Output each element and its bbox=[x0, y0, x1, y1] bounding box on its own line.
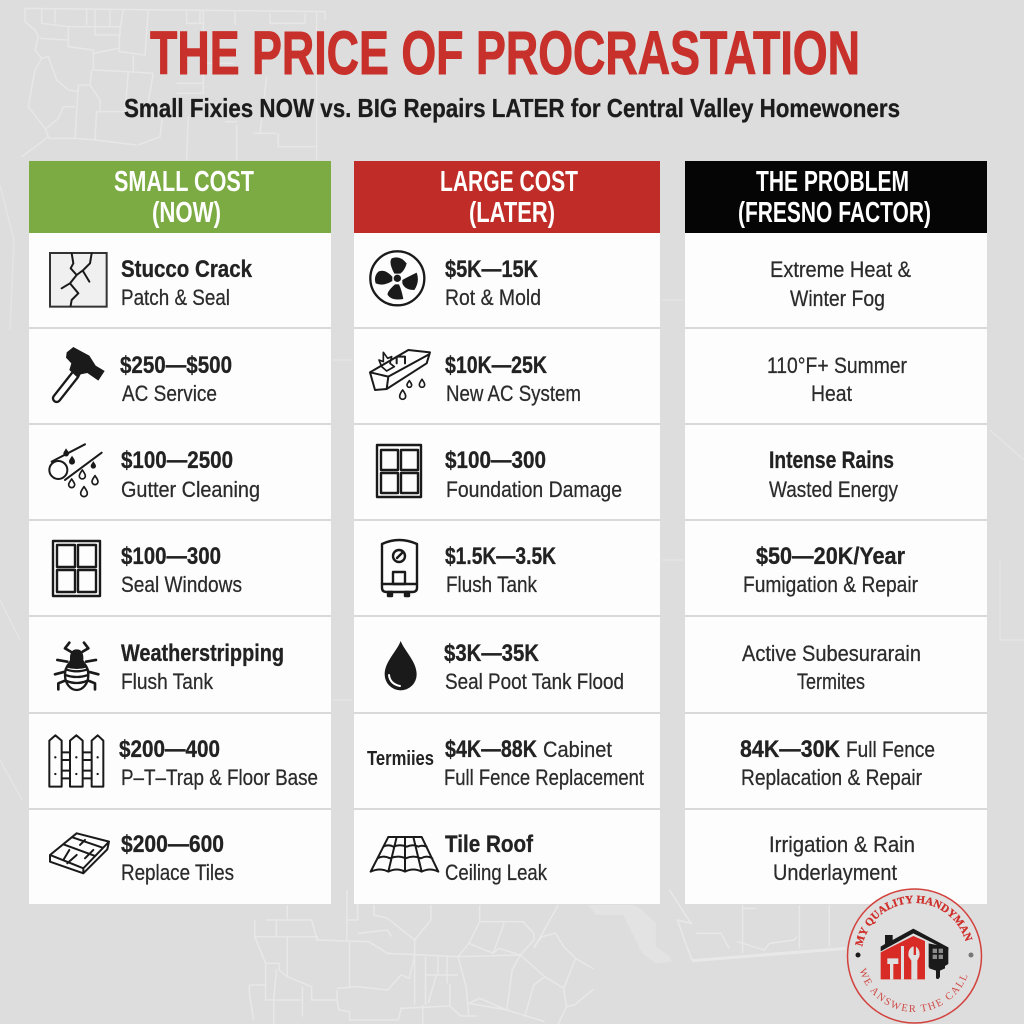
row 4 text: Seal Windows bbox=[121, 572, 242, 597]
icon: stucco crack bbox=[50, 253, 107, 307]
row 3 text: Gutter Cleaning bbox=[121, 477, 260, 502]
row 7 text: Ceiling Leak bbox=[445, 860, 548, 885]
logo house icon bbox=[881, 929, 948, 979]
row 3 text: Foundation Damage bbox=[446, 477, 622, 502]
row 5 text bbox=[121, 640, 284, 694]
row 5 text: Active Subesurarain bbox=[742, 641, 921, 666]
row 6 text bbox=[444, 736, 644, 790]
row 6 text bbox=[119, 736, 318, 790]
row 6 text: Cabinet bbox=[543, 737, 612, 762]
row 4 text: Flush Tank bbox=[446, 572, 538, 597]
icon: gutter bbox=[49, 444, 102, 497]
row 1 text bbox=[770, 257, 911, 311]
label: termites: Termiies bbox=[367, 748, 434, 770]
row 4 text bbox=[121, 543, 242, 597]
row 4 text bbox=[445, 543, 557, 597]
icon: fan bbox=[370, 251, 424, 305]
row 6 text: $200—400 bbox=[119, 736, 220, 763]
row 4 text: $100—300 bbox=[121, 543, 221, 570]
row 7 text: Underlayment bbox=[773, 860, 897, 885]
row 4 text bbox=[743, 543, 918, 597]
row 7 text bbox=[769, 832, 915, 885]
header: the problem: THE PROBLEM bbox=[756, 166, 909, 198]
row 1 text: Patch & Seal bbox=[121, 285, 230, 310]
row 2 text bbox=[445, 352, 581, 406]
row 7 text: Replace Tiles bbox=[121, 860, 234, 885]
header: small cost: SMALL COST bbox=[114, 166, 254, 198]
logo name: MY QUALITY HANDYMAN bbox=[854, 896, 973, 947]
row 1 text: $5K—15K bbox=[445, 256, 539, 283]
row 3 text bbox=[121, 447, 260, 502]
row 2 text bbox=[120, 352, 232, 406]
icon: clogged gutter bbox=[370, 350, 430, 399]
logo tagline: WE ANSWER THE CALL bbox=[860, 968, 968, 1012]
row 7 text: Tile Roof bbox=[445, 831, 534, 858]
row 3 text: $100—2500 bbox=[121, 447, 233, 474]
row 6 text: Full Fence Replacement bbox=[444, 765, 644, 790]
subtitle: Small Fixies NOW vs. BIG Repairs LATER for Central Valley Homewoners bbox=[124, 93, 900, 123]
header: large cost: (LATER) bbox=[469, 197, 555, 229]
row 5 text: Termites bbox=[797, 669, 865, 694]
row 4 text: $1.5K—3.5K bbox=[445, 543, 557, 570]
row 5 text bbox=[444, 640, 624, 694]
icon: termite bug bbox=[55, 643, 98, 690]
row 6 text: 84K—30K bbox=[740, 736, 841, 763]
icon: floor tiles bbox=[50, 833, 109, 873]
row 6 text: $4K—88K bbox=[445, 736, 538, 763]
row 2 text: $10K—25K bbox=[445, 352, 548, 379]
row 3 text bbox=[445, 447, 622, 502]
row 1 text bbox=[121, 256, 253, 310]
row 4 text: $50—20K/Year bbox=[756, 543, 905, 570]
logo badge bbox=[846, 888, 982, 1024]
icon: window bbox=[53, 541, 100, 596]
row 2 text bbox=[767, 353, 907, 406]
row 2 text: Heat bbox=[811, 381, 852, 406]
row 1 text: Extreme Heat & bbox=[770, 257, 911, 282]
row 5 text: Seal Poot Tank Flood bbox=[445, 669, 624, 694]
row 1 text bbox=[445, 256, 541, 310]
row 2 text: 110°F+ Summer bbox=[767, 353, 907, 378]
row 3 text: $100—300 bbox=[445, 447, 546, 474]
header: the problem bbox=[685, 161, 987, 233]
row 2 text: $250—$500 bbox=[120, 352, 232, 379]
header: small cost bbox=[29, 161, 331, 233]
row 6 text: Replacation & Repair bbox=[741, 765, 922, 790]
row 6 text bbox=[740, 736, 935, 790]
row 6 text: Full Fence bbox=[846, 737, 935, 762]
row 6 text: P–T–Trap & Floor Base bbox=[121, 765, 318, 790]
icon: window bbox=[377, 445, 421, 497]
row 5 text bbox=[742, 641, 921, 694]
row 3 text bbox=[769, 447, 898, 502]
icon: water heater bbox=[382, 540, 417, 596]
row 1 text: Rot & Mold bbox=[445, 285, 541, 310]
icon: tile roof bbox=[371, 837, 438, 872]
row 1 text: Winter Fog bbox=[790, 286, 885, 311]
row 2 text: New AC System bbox=[446, 381, 581, 406]
row 4 text: Fumigation & Repair bbox=[743, 572, 918, 597]
row 7 text bbox=[121, 831, 234, 885]
panel: the problem (fresno factor) bbox=[685, 161, 987, 904]
row 5 text: Weatherstripping bbox=[121, 640, 284, 667]
row 5 text: $3K—35K bbox=[444, 640, 540, 667]
row 5 text: Flush Tank bbox=[121, 669, 214, 694]
row 7 text: Irrigation & Rain bbox=[769, 832, 915, 857]
header: large cost bbox=[354, 161, 660, 233]
header: small cost: (NOW) bbox=[152, 197, 221, 229]
icon: water drop bbox=[385, 641, 417, 690]
icon: fence bbox=[49, 735, 103, 787]
row 1 text: Stucco Crack bbox=[121, 256, 253, 283]
row 2 text: AC Service bbox=[122, 381, 217, 406]
header: the problem: (FRESNO FACTOR) bbox=[738, 197, 931, 229]
row 7 text bbox=[445, 831, 548, 885]
row 7 text: $200—600 bbox=[121, 831, 224, 858]
panel: small cost (now) bbox=[29, 161, 331, 904]
panel: large cost (later) bbox=[354, 161, 660, 904]
row 3 text: Intense Rains bbox=[769, 447, 894, 474]
header: large cost: LARGE COST bbox=[440, 166, 578, 198]
row 3 text: Wasted Energy bbox=[769, 477, 898, 502]
icon: hammer bbox=[57, 347, 105, 398]
